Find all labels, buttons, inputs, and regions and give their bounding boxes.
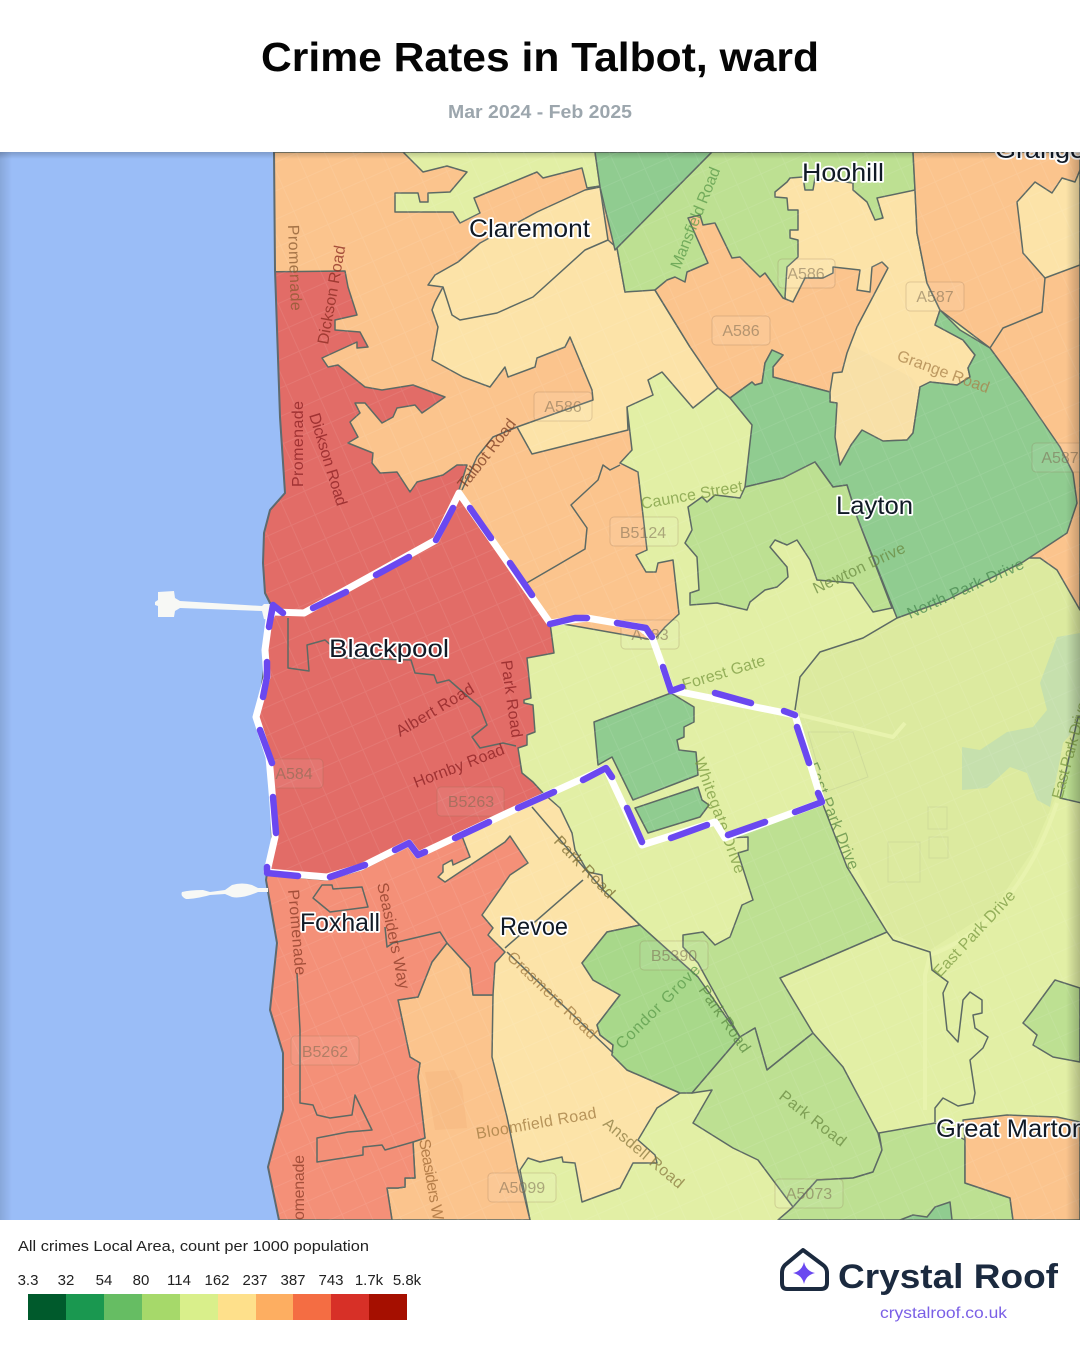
region: Caunce green <box>685 462 892 612</box>
region: Mansfield green <box>617 152 915 347</box>
legend title: All crimes Local Area, count per 1000 population <box>18 1238 369 1255</box>
region: red Blackpool <box>250 271 554 877</box>
region: Park Road green <box>692 1028 882 1207</box>
road name labels: Park Road <box>497 659 525 739</box>
place name labels <box>300 136 1080 1143</box>
brand name: Crystal Roof <box>838 1258 1059 1296</box>
region: park lake <box>962 633 1080 807</box>
region: orange east <box>913 152 1080 610</box>
region: ward green south <box>635 787 709 833</box>
road name labels: Whitegate Drive <box>690 756 748 876</box>
region: darker cream Grange field <box>830 392 887 463</box>
legend scale values: 5.8k <box>393 1272 422 1289</box>
region: small dark green south <box>900 1202 952 1220</box>
road shields: B5263 <box>448 794 494 811</box>
road name labels: East Park Drive <box>930 887 1019 981</box>
ward boundary: Talbot <box>256 493 822 877</box>
road name labels: Ansdell Road <box>599 1115 687 1192</box>
park features <box>808 732 948 882</box>
place name labels: Grange <box>995 136 1080 164</box>
road shields: A586 <box>722 323 760 340</box>
road name labels: Hornby Road <box>411 741 507 792</box>
map edge shading <box>0 152 1080 1220</box>
road shields: A5073 <box>786 1186 832 1203</box>
legend scale values: 3.3 <box>18 1272 38 1289</box>
legend scale values: 1.7k <box>355 1272 384 1289</box>
legend scale values: 114 <box>167 1272 191 1289</box>
road name labels: Newton Drive <box>811 540 908 598</box>
place name labels: Hoohill <box>802 159 884 187</box>
logo: Crystal Roof <box>782 1250 1059 1322</box>
road name labels: Condor Grove <box>613 962 704 1053</box>
region: coral Foxhall <box>250 836 528 1220</box>
legend scale values: 80 <box>133 1272 149 1289</box>
region: Layton dark green <box>730 310 1077 618</box>
website: crystalroof.co.uk <box>880 1305 1008 1322</box>
road name labels: Dickson Road <box>305 411 349 508</box>
region: park <box>795 558 1080 950</box>
road shields: A584 <box>275 766 313 783</box>
legend scale values <box>18 1272 422 1289</box>
legend scale values: 743 <box>318 1272 344 1289</box>
legend <box>18 1238 422 1320</box>
road name labels: Grange Road <box>895 348 992 397</box>
road name labels: Mansfield Road <box>668 165 724 271</box>
region: east edge green <box>1060 717 1080 805</box>
road shields: B5390 <box>651 948 697 965</box>
road shields: A5099 <box>499 1180 545 1197</box>
legend colour swatches <box>28 1294 407 1320</box>
road name labels: Seasiders Way <box>373 881 412 990</box>
road name labels: Seasiders W <box>415 1138 446 1222</box>
region: orange north-west block <box>250 152 679 640</box>
legend scale values: 237 <box>242 1272 268 1289</box>
road name labels: Bloomfield Road <box>475 1105 598 1143</box>
region: ward green north <box>594 693 698 800</box>
place name labels: Blackpool <box>329 635 449 663</box>
road shields: A583 <box>631 627 669 644</box>
road shields: A586 <box>787 266 825 283</box>
region: lime band north <box>395 152 600 223</box>
road name labels: Park Road <box>550 833 618 902</box>
road shields: B5124 <box>620 525 666 542</box>
road name labels: Park Road <box>776 1088 849 1150</box>
road name labels: East Park Drive <box>803 760 862 872</box>
road shields: A587 <box>916 289 954 306</box>
region: Whitegate green <box>683 802 887 1070</box>
legend scale values: 54 <box>96 1272 112 1289</box>
road name labels: Promenade <box>290 401 307 487</box>
place name labels: Foxhall <box>300 909 380 937</box>
legend scale values: 162 <box>204 1272 230 1289</box>
road name labels <box>284 165 1080 1222</box>
road shields: B5262 <box>302 1044 348 1061</box>
icon: north pier <box>155 591 270 620</box>
road name labels: Forest Gate <box>680 652 768 694</box>
region: retail block <box>425 1070 467 1130</box>
region: cream Claremont <box>428 187 718 454</box>
road name labels: Talbot Road <box>455 416 520 492</box>
road name labels: Albert Road <box>393 681 477 740</box>
region: Condor Grove green <box>582 925 740 1093</box>
subtitle: date range: Mar 2024 - Feb 2025 <box>448 102 632 122</box>
road name labels: Promenade <box>284 889 308 976</box>
region: orange A586 <box>655 215 888 398</box>
legend scale values: 32 <box>58 1272 74 1289</box>
region: dark green north <box>595 152 712 250</box>
road shields: A587 <box>1041 450 1079 467</box>
sea <box>0 150 285 1225</box>
road shields: A586 <box>544 399 582 416</box>
title: Crime Rates in Talbot, ward <box>261 34 819 80</box>
place name labels: Layton <box>836 492 913 520</box>
road name labels: Dickson Road <box>315 244 349 346</box>
region: orange south <box>387 943 530 1220</box>
region: south green <box>778 1123 1013 1220</box>
street grid <box>250 152 1080 1220</box>
place name labels: Revoe <box>500 913 568 941</box>
place name labels: Claremont <box>469 215 590 243</box>
region: cream north-east <box>1017 170 1080 278</box>
region: orange Great Marton <box>963 1115 1080 1220</box>
interior area boundaries <box>288 240 1045 1162</box>
road name labels: Park Road <box>695 983 753 1056</box>
legend scale values: 387 <box>280 1272 306 1289</box>
road name labels: Grasmere Road <box>503 949 600 1043</box>
region: cream Revoe <box>430 793 680 1220</box>
road name labels: Promenade <box>284 225 304 311</box>
park paths <box>800 715 1057 1110</box>
region: cream Hoohill and Grange <box>775 177 975 465</box>
icon: house with star <box>782 1250 827 1289</box>
icon: central pier <box>182 884 268 899</box>
road name labels: Caunce Street <box>640 478 745 513</box>
place name labels: Great Marton <box>936 1115 1080 1143</box>
region: far-right green <box>1023 980 1080 1062</box>
road name labels: omenade <box>291 1155 308 1220</box>
road name labels: North Park Drive <box>905 556 1027 623</box>
road shields <box>265 259 1080 1208</box>
